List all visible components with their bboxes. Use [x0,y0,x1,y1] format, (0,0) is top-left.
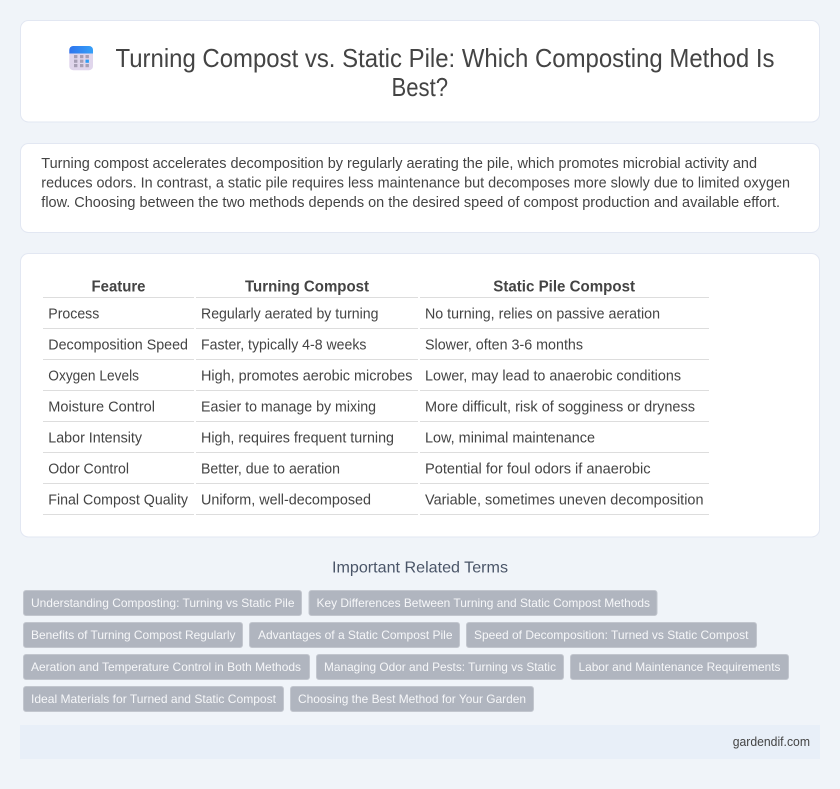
table row: moisture control [48,400,695,416]
table row: odor control: Better, due to aeration [201,462,340,478]
title [116,45,774,102]
table row: moisture control: Moisture Control [48,400,155,416]
tag [309,590,657,616]
table row: final compost quality [48,493,704,509]
table row: oxygen levels [48,369,681,385]
text block: introduction: Turning compost accelerates decomposition by regularly aerating the pile, which promotes microbial activity and [41,156,757,172]
title: Best? [392,74,448,102]
table row: odor control [48,462,651,478]
heading: important related terms: Important Related Terms [332,560,508,577]
tag [466,622,756,648]
tag [24,654,310,680]
icon: calendar [69,46,93,70]
table header row [92,278,636,296]
tag list: related terms [24,590,788,712]
table row: process: Process [48,307,99,323]
footer: gardendif.com [733,734,810,749]
tag: Ideal Materials for Turned and Static Compost [31,692,277,706]
tag: Labor and Maintenance Requirements [578,660,780,674]
table header row: Turning Compost [245,278,370,296]
table header row: Static Pile Compost [493,278,636,296]
table row: final compost quality: Variable, sometimes uneven decomposition [425,493,704,509]
footer [20,725,820,759]
tag: Choosing the Best Method for Your Garden [298,692,526,706]
table row: labor intensity [48,431,595,447]
table row: oxygen levels: Oxygen Levels [48,369,139,385]
text block: introduction: flow. Choosing between the two methods depends on the desired speed of compost production and available effort. [41,195,780,211]
table row: decomposition speed: Decomposition Speed [48,338,188,354]
text block: introduction [41,156,790,211]
table row: decomposition speed: Faster, typically 4-8 weeks [201,338,366,354]
panel: introduction [20,144,820,232]
tag: Aeration and Temperature Control in Both Methods [31,660,301,674]
text block: introduction: reduces odors. In contrast, a static pile requires less maintenance but decomposes more slowly due to limited oxygen [41,176,790,192]
tag [570,654,788,680]
tag [24,590,302,616]
table row: oxygen levels: Lower, may lead to anaerobic conditions [425,369,681,385]
table row: labor intensity: High, requires frequent turning [201,431,394,447]
table row: oxygen levels: High, promotes aerobic microbes [201,369,412,385]
table row: process: No turning, relies on passive aeration [425,307,660,323]
table header row: Feature [92,278,146,296]
table row: moisture control: Easier to manage by mixing [201,400,376,416]
table row: final compost quality: Uniform, well-decomposed [201,493,371,509]
tag [24,686,284,712]
tag: Managing Odor and Pests: Turning vs Static [324,660,556,674]
table row: process: Regularly aerated by turning [201,307,378,323]
table row: decomposition speed [48,338,583,354]
tag: Speed of Decomposition: Turned vs Static Compost [474,628,749,642]
table row: labor intensity: Labor Intensity [48,431,143,447]
table row: decomposition speed: Slower, often 3-6 months [425,338,583,354]
table row: odor control: Odor Control [48,462,129,478]
tag: Key Differences Between Turning and Static Compost Methods [316,596,650,610]
tag [290,686,534,712]
table row: labor intensity: Low, minimal maintenance [425,431,595,447]
panel: header [20,20,820,122]
tag: Benefits of Turning Compost Regularly [31,628,236,642]
tag [316,654,564,680]
tag [24,622,242,648]
title: Turning Compost vs. Static Pile: Which Composting Method Is [116,45,774,73]
panel: comparison table [20,254,820,537]
tag: Understanding Composting: Turning vs Static Pile [31,596,295,610]
table row: moisture control: More difficult, risk of sogginess or dryness [425,400,695,416]
table row: process [48,307,660,323]
table row: final compost quality: Final Compost Quality [48,493,189,509]
tag [250,622,460,648]
tag: Advantages of a Static Compost Pile [258,628,453,642]
table row: odor control: Potential for foul odors if anaerobic [425,462,650,478]
